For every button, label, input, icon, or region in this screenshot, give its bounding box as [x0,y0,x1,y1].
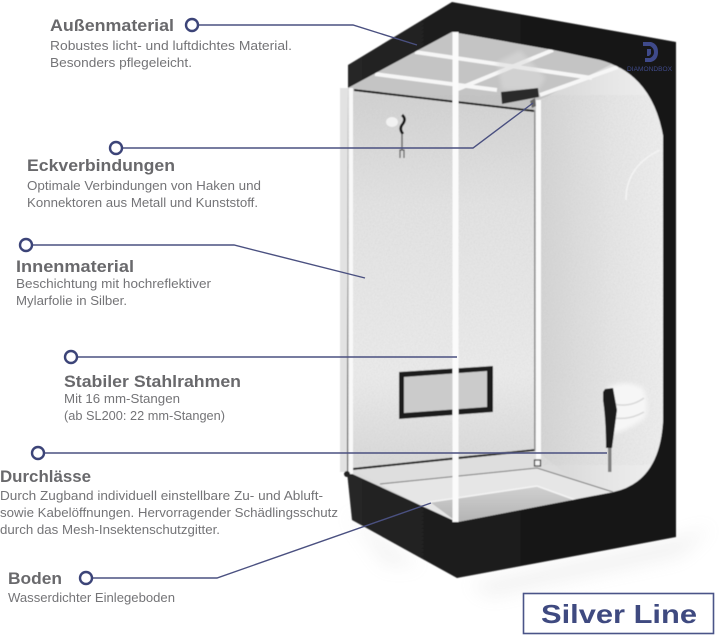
heading: Außenmaterial [50,16,174,35]
ceiling panel [348,32,620,111]
description: (ab SL200: 22 mm-Stangen) [64,409,225,423]
marker [186,19,198,31]
description [0,489,338,537]
description [27,179,261,210]
back corner pole [536,100,541,460]
lower back wall [352,450,537,484]
badge text: Silver Line [541,599,697,629]
front pole [452,32,458,522]
callout: Außenmaterial [50,16,417,70]
foil texture [654,222,655,223]
marker [80,572,92,584]
leader line [92,503,431,578]
description: Besonders pflegeleicht. [50,56,192,70]
heading: Innenmaterial [16,257,134,276]
top back bar [354,90,534,111]
marker [32,447,44,459]
hook reflection [386,117,398,127]
description [16,277,211,308]
floor corner connector [534,460,540,466]
tent floor shadow [345,510,712,596]
right wall [598,68,664,496]
floor inner tray [430,486,581,522]
heading: Stabiler Stahlrahmen [64,372,241,391]
leader line [44,452,607,454]
description [64,392,225,423]
description: Mylarfolie in Silber. [16,294,127,308]
marker [65,351,77,363]
back pole shadow [534,110,536,450]
left bottom corner [344,471,350,477]
marker [20,239,32,251]
mesh sleeve [607,383,647,434]
ceiling bars [375,50,618,95]
description: Durch Zugband individuell einstellbare Zu- und Abluft- [0,489,323,503]
window frame [399,366,493,419]
ceiling vent [498,52,544,89]
leader line [32,245,365,278]
black tent shell [347,2,676,578]
description: Konnektoren aus Metall und Kunststoff. [27,196,258,210]
tent interior [347,31,664,522]
heading: Boden [8,569,62,588]
corner connector [530,98,536,108]
callout: Innenmaterial [16,239,365,308]
description: Beschichtung mit hochreflektiver [16,277,211,291]
callout: Boden [8,503,431,605]
window mesh [404,371,487,413]
grow tent [340,2,680,578]
floor tray [384,469,612,522]
badge frame [524,594,714,634]
brand logo [627,42,673,73]
description: Mit 16 mm-Stangen [64,392,180,406]
description: Optimale Verbindungen von Haken und [27,179,261,193]
hook loop [401,115,404,134]
description [50,39,292,70]
description: Wasserdichter Einlegeboden [8,591,175,605]
logo text: DIAMONDBOX [627,66,673,73]
drawstring cord [608,448,612,472]
badge: Silver Line [524,594,714,634]
ceiling lamp ballast [501,88,539,104]
left door strip [340,88,348,472]
cable port [603,383,647,472]
vent window [399,366,493,419]
leader line [198,25,417,45]
mesh folds [614,398,644,418]
description: Robustes licht- und luftdichtes Material. [50,39,292,53]
black drawstring sleeve [603,388,617,448]
callout: Eckverbindungen [27,103,533,210]
hook clip [400,150,404,158]
callout: Durchlässe [0,447,607,537]
left pole [349,88,353,474]
description: sowie Kabelöffnungen. Hervorragender Schädlingsschutz [0,506,338,520]
interior base [347,31,664,522]
floor crease [380,468,613,492]
leader line [122,103,533,148]
back wall [353,92,534,412]
description: durch das Mesh-Insektenschutzgitter. [0,523,220,537]
marker [110,142,122,154]
heading: Durchlässe [0,467,91,486]
callout: Stabiler Stahlrahmen [64,351,457,423]
hook rod [401,134,403,150]
leader line [77,356,457,358]
right wall seam [626,150,660,200]
floor back edge [353,450,535,469]
tray rim [430,486,581,502]
logo mark [643,42,658,62]
hanging hook [386,115,404,158]
heading: Eckverbindungen [27,156,175,175]
